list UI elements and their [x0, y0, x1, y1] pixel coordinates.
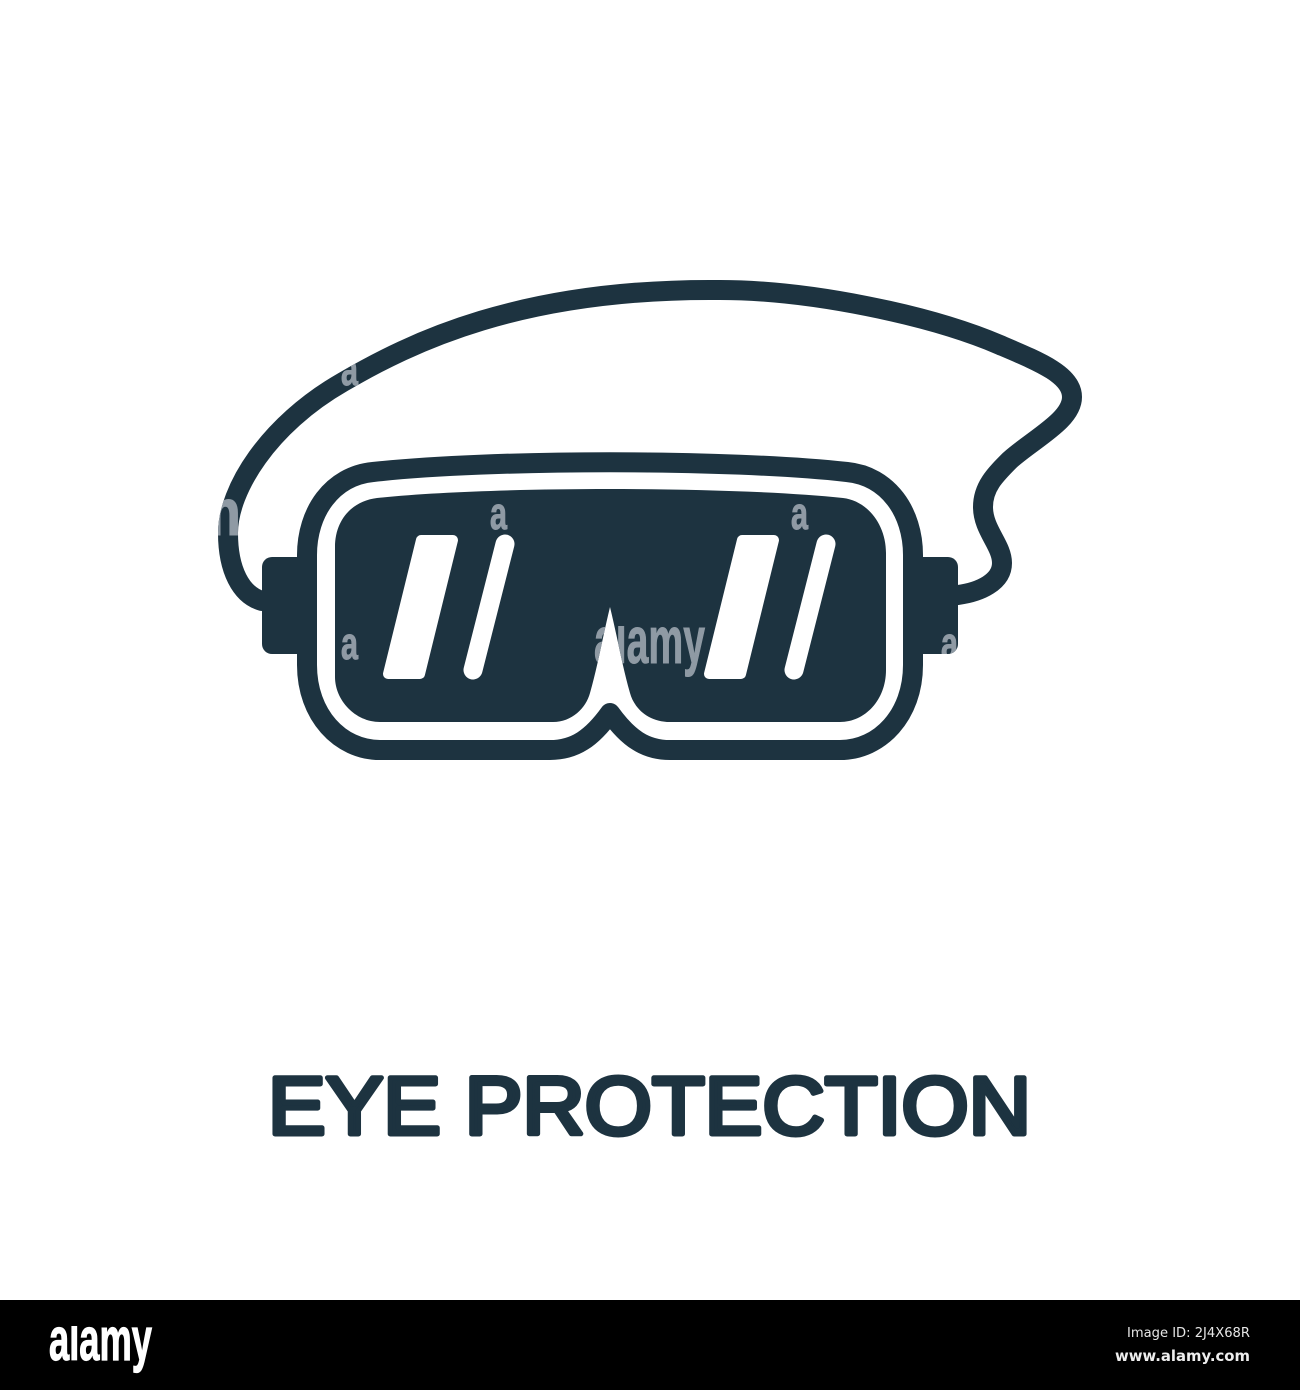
- goggle outer frame: [307, 462, 913, 750]
- footer logo: alamy: alamy: [49, 1306, 152, 1373]
- left lens glare: [388, 540, 505, 674]
- right lens glare: [709, 540, 826, 674]
- watermark over the icon: [191, 344, 959, 677]
- watermark over the icon: a: [490, 488, 508, 539]
- watermark over the icon: a: [791, 488, 809, 539]
- infographic canvas: [0, 280, 1300, 1390]
- footer band: [0, 1300, 1300, 1390]
- goggle strap: [228, 290, 1072, 601]
- watermark over the icon: alamy: [594, 603, 705, 677]
- icon: safety goggles: [191, 290, 1072, 750]
- title: eye protection: EYE PROTECTION: [268, 1061, 1031, 1152]
- right strap clip: [913, 557, 958, 654]
- watermark over the icon: a: [941, 618, 959, 669]
- goggle lens: [335, 489, 886, 722]
- footer image id: Image ID: 2J4X68R: [1127, 1326, 1250, 1341]
- footer website: www.alamy.com: [1115, 1347, 1250, 1365]
- left strap clip: [262, 557, 307, 654]
- watermark over the icon: m: [191, 475, 241, 549]
- watermark over the icon: a: [341, 344, 359, 395]
- footer background: [0, 1300, 1300, 1390]
- watermark over the icon: a: [341, 618, 359, 669]
